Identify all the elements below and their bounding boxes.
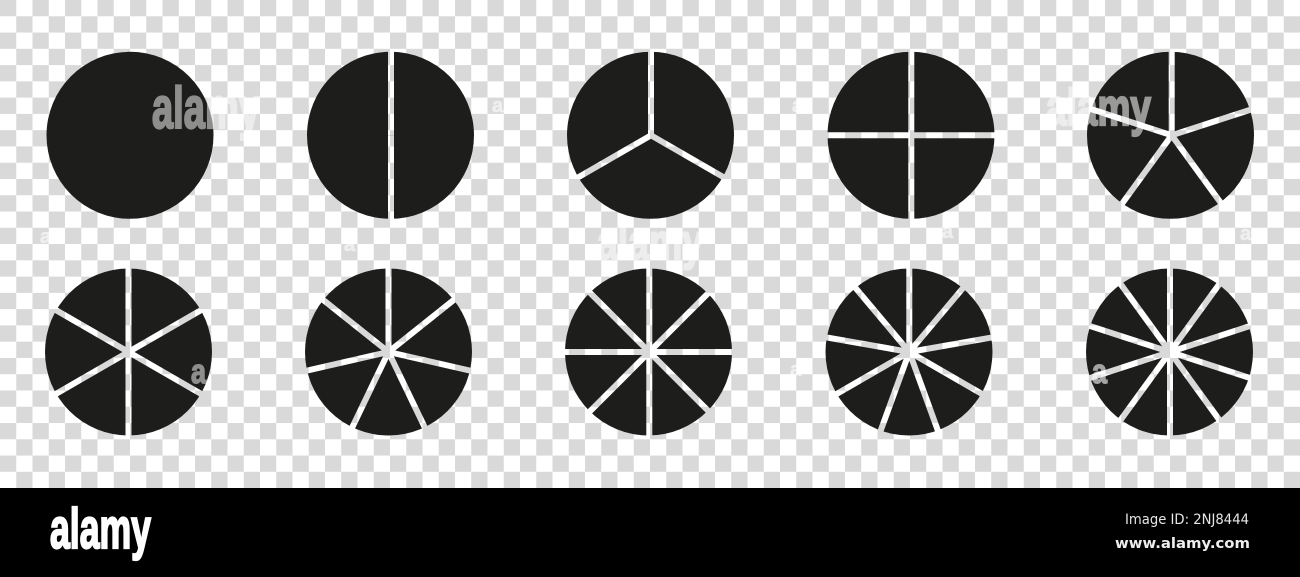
pie: 5 segments xyxy=(1087,52,1254,219)
pie: 2 segments xyxy=(307,52,474,219)
watermark: faint marks on background xyxy=(40,95,1252,381)
footer image id: Image ID: 2NJ8444 xyxy=(1125,512,1249,528)
pie: 6 segments xyxy=(45,268,212,436)
watermark: faint marks on background: a xyxy=(492,95,504,117)
footer website: www.alamy.com xyxy=(1115,536,1250,552)
pie: whole circle xyxy=(46,52,214,219)
footer bar xyxy=(0,488,1300,577)
watermark: faint marks on background: a xyxy=(40,226,52,248)
watermark: top left: alamy xyxy=(152,76,260,141)
pie: 8 segments xyxy=(565,268,732,436)
watermark: faint marks on background: a xyxy=(792,95,804,117)
pie: 4 segments xyxy=(828,52,994,219)
watermark: faint marks on background: a xyxy=(344,234,356,256)
pie: 10 segments xyxy=(1086,268,1253,436)
watermark: small letter on ten-segment pie: a xyxy=(1092,353,1108,391)
pie: 3 segments xyxy=(567,52,734,219)
watermark: faint marks on background: a xyxy=(942,221,954,243)
pie: 9 segments xyxy=(826,268,992,436)
watermark: faint marks on background: a xyxy=(1240,223,1252,245)
footer logo: alamy xyxy=(50,497,151,561)
pie: 7 segments xyxy=(305,268,472,436)
watermark: faint marks on background: a xyxy=(790,359,802,381)
watermark: top right: alamy xyxy=(1046,79,1151,137)
watermark: small letter on six-segment pie: a xyxy=(191,353,207,391)
watermark: centre: alamy xyxy=(597,214,703,270)
